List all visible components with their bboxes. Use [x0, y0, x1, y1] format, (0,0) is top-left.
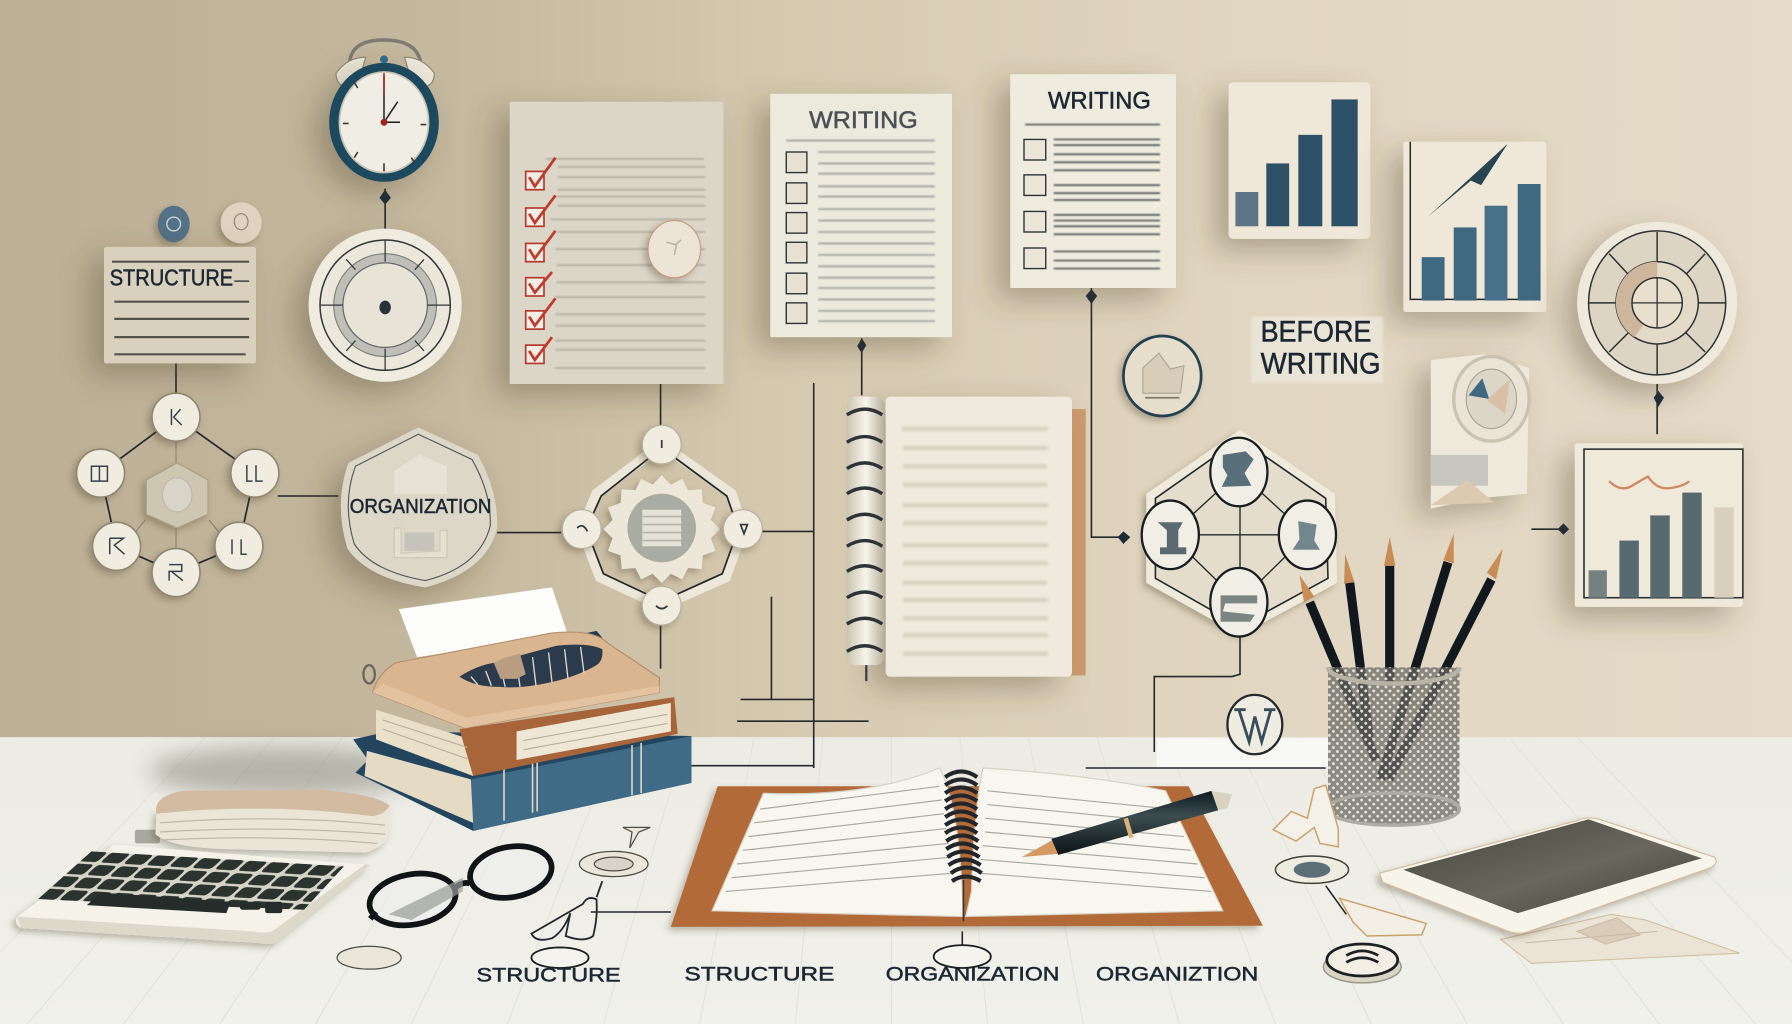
diagram: pentagon network: [77, 393, 279, 597]
icon: wp stamp: [1227, 695, 1282, 754]
blue book: [353, 731, 691, 831]
pencil cup: [1299, 534, 1503, 825]
typewriter on books: [353, 587, 691, 831]
pen on notebook: [1022, 791, 1232, 857]
notebook on wall: [847, 397, 1086, 681]
panel: checklist: [510, 102, 723, 384]
icon: dial: [309, 229, 462, 382]
paper sheet: [399, 587, 568, 657]
heading: writing: WRITING: [1048, 88, 1151, 115]
paper scrap: [1501, 914, 1739, 963]
panel: writing checklist one: [770, 94, 952, 337]
diagram: gear hub: [562, 425, 762, 625]
label: before writing: WRITING: [1261, 348, 1381, 381]
bar chart: rising bars with arrow: [1403, 142, 1546, 312]
icon: mountain badge: [1123, 336, 1201, 416]
tablet: [1379, 818, 1716, 933]
label: before writing: [1251, 316, 1383, 383]
desk surface: [0, 737, 1792, 1024]
icon: clipped note: [1431, 354, 1529, 509]
labels under notebook: STRUCTURE: [477, 965, 621, 987]
icon: alarm clock: [329, 40, 439, 182]
right page: [966, 768, 1223, 917]
desk trinkets left: [337, 827, 650, 969]
panel: writing checklist two: [1010, 74, 1176, 288]
glasses: [365, 840, 556, 932]
wall background: [0, 0, 1792, 738]
keyboard: [16, 845, 370, 944]
labels under notebook: ORGANIZATION: [886, 964, 1059, 986]
labels under notebook: [477, 964, 1258, 987]
tan stack of pages: [135, 790, 390, 853]
icon: pinned button: [648, 221, 701, 278]
open notebook: [671, 768, 1263, 927]
connector ring: [934, 945, 991, 968]
checkbox list: [526, 158, 555, 363]
diagram: hexagon network: [1142, 430, 1337, 637]
leather board: [671, 786, 1263, 927]
bar chart: framed bars: [1575, 443, 1743, 607]
badge: organization: [341, 427, 497, 587]
connector lines: [176, 189, 1664, 951]
desk trinkets right: [1273, 785, 1426, 983]
icon: blue button: [158, 206, 190, 242]
brown book: [376, 697, 678, 776]
typewriter body: [373, 632, 659, 728]
icon: beige button: [221, 202, 262, 243]
label: before writing: BEFORE: [1261, 316, 1371, 349]
carriage: [391, 631, 602, 680]
pens in cup: [1310, 562, 1491, 779]
label: organization: ORGANIZATION: [350, 495, 491, 518]
left page: [712, 768, 963, 917]
labels under notebook: STRUCTURE: [685, 964, 834, 986]
spiral binding: [945, 771, 982, 881]
heading: writing: WRITING: [809, 107, 918, 134]
panel: structure card: [104, 247, 256, 363]
icon: segmented wheel: [1577, 222, 1737, 384]
labels under notebook: ORGANIZTION: [1096, 964, 1258, 986]
heading: structure: STRUCTURE: [110, 265, 233, 291]
bar chart: rising bars one: [1229, 82, 1370, 239]
